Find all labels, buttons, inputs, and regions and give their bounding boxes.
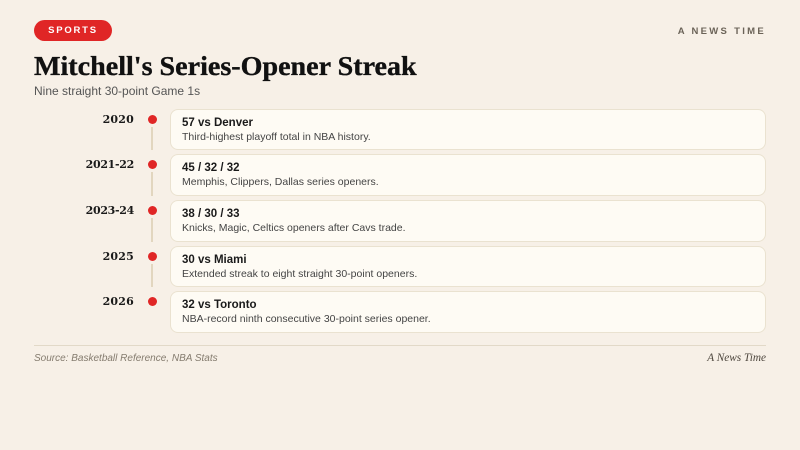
entry: 2023-24: 2023-24: [86, 204, 134, 217]
entry: 2025: [103, 246, 766, 287]
title: Mitchell's Series-Opener Streak: [34, 51, 417, 81]
entry: 2021-22: Memphis, Clippers, Dallas series openers.: [182, 176, 379, 188]
source note: Source: Basketball Reference, NBA Stats: [34, 352, 218, 364]
entry: 2021-22: 2021-22: [86, 158, 134, 171]
subtitle: Nine straight 30-point Game 1s: [34, 84, 200, 98]
entry: 2026: 2026: [103, 295, 134, 308]
entry: 2023-24: 38 / 30 / 33: [182, 208, 240, 220]
category badge: SPORTS: [48, 25, 98, 36]
entry: 2020: [103, 109, 766, 150]
entry: 2020: 2020: [103, 113, 134, 126]
entry: 2021-22: [86, 154, 766, 196]
entry: 2026: 32 vs Toronto: [182, 299, 257, 311]
entry: 2026: NBA-record ninth consecutive 30-point series opener.: [182, 313, 431, 325]
entry: 2026: [103, 291, 766, 333]
entry: 2021-22: 45 / 32 / 32: [182, 162, 240, 174]
brand label: A NEWS TIME: [678, 26, 766, 36]
entry: 2025: 2025: [103, 250, 134, 263]
entry: 2023-24: [86, 200, 766, 242]
entry: 2025: Extended streak to eight straight 30-point openers.: [182, 268, 417, 280]
footer brand: A News Time: [707, 352, 766, 364]
category badge: [34, 20, 112, 41]
entry: 2020: 57 vs Denver: [182, 117, 253, 129]
entry: 2020: Third-highest playoff total in NBA history.: [182, 131, 371, 143]
timeline: [86, 109, 766, 333]
entry: 2025: 30 vs Miami: [182, 254, 247, 266]
entry: 2023-24: Knicks, Magic, Celtics openers after Cavs trade.: [182, 222, 406, 234]
